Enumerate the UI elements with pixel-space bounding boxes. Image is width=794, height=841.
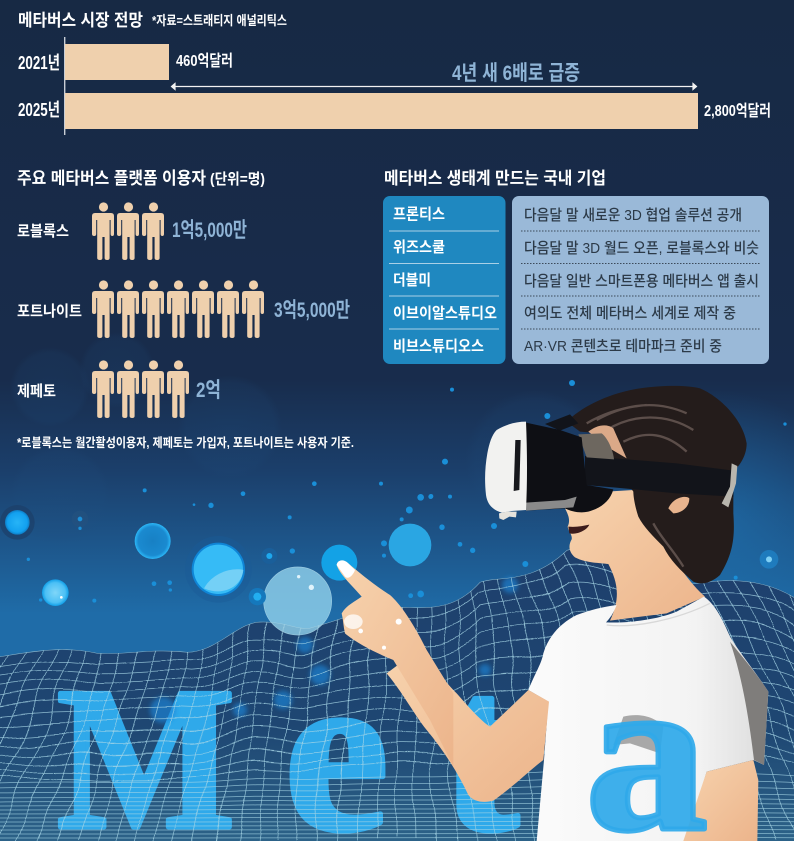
far arm <box>683 760 758 841</box>
bar 2025 <box>65 93 698 129</box>
bubble <box>135 523 171 559</box>
knuckle highlight <box>344 614 363 629</box>
dense foreground latitude lines <box>0 770 794 838</box>
wireframe terrain backing <box>0 549 794 841</box>
panel: company plans <box>512 196 769 364</box>
value: 1억5,000만 <box>172 219 247 242</box>
longitudinal lines <box>0 540 794 841</box>
floating bubbles and particles <box>0 481 445 635</box>
heading: domestic companies: 메타버스 생태계 만드는 국내 기업 <box>384 169 606 188</box>
wireframe terrain grid <box>0 540 794 841</box>
plan 3: 다음달 일반 스마트폰용 메타버스 앱 출시 <box>524 273 759 290</box>
small particles right <box>406 380 787 598</box>
label: 제페토 <box>17 383 56 400</box>
company 4: 이브이알스튜디오 <box>393 305 497 322</box>
chart title: 메타버스 시장 전망 <box>18 11 143 30</box>
headset front cover <box>485 422 527 513</box>
plan 4: 여의도 전체 메타버스 세계로 제작 중 <box>524 305 736 322</box>
strap buckle <box>722 463 737 507</box>
label 2021: 2021년 <box>18 53 60 73</box>
footnote: *로블록스는 월간활성이용자, 제페토는 가입자, 포트나이트는 사용자 기준. <box>17 435 354 450</box>
forehead <box>588 425 627 458</box>
value 2025: 2,800억달러 <box>704 102 771 120</box>
value: 3억5,000만 <box>274 299 350 322</box>
headset side frame <box>578 433 614 459</box>
shirt <box>528 597 768 841</box>
plan 1: 다음달 말 새로운 3D 협업 솔루션 공개 <box>524 207 742 224</box>
hair <box>567 386 747 583</box>
person icons <box>92 280 264 338</box>
arrow: growth span <box>172 84 696 90</box>
ear <box>668 497 689 513</box>
growth callout: 4년 새 6배로 급증 <box>452 62 580 85</box>
person icons <box>92 360 189 418</box>
source note: *자료=스트래티지 애널리틱스 <box>152 13 287 28</box>
value: 2억 <box>196 379 221 402</box>
panel: company names <box>383 196 506 364</box>
bubble <box>389 524 431 566</box>
hair highlights <box>587 405 693 567</box>
boy with VR headset <box>387 386 768 841</box>
company 1: 프론티스 <box>393 206 445 223</box>
pictogram row: Roblox <box>17 202 247 260</box>
cover slot <box>514 440 521 491</box>
value 2021: 460억달러 <box>176 52 233 70</box>
mesh glints <box>150 577 518 723</box>
top headset strap <box>545 414 578 431</box>
bubble <box>321 545 357 581</box>
pointing hand <box>337 560 453 767</box>
big letters: Met <box>57 623 519 841</box>
bar 2021 <box>65 44 169 80</box>
heading: platform users: (단위=명) <box>210 171 265 188</box>
company 2: 위즈스쿨 <box>393 239 445 256</box>
company 5: 비브스튜디오스 <box>393 338 484 355</box>
pictogram row: Zepeto <box>17 360 221 418</box>
headset lower trim <box>526 497 577 511</box>
label 2025: 2025년 <box>18 100 60 120</box>
translucent bubble <box>264 567 332 635</box>
neck and face <box>565 490 705 621</box>
label: 로블록스 <box>17 223 69 240</box>
background bokeh glows <box>10 332 794 650</box>
plan 5: AR·VR 콘텐츠로 테마파크 준비 중 <box>524 338 722 355</box>
axis <box>64 37 65 135</box>
plan 2: 다음달 말 3D 월드 오픈, 로블록스와 비슷 <box>524 240 759 257</box>
bubble <box>42 579 69 606</box>
company 3: 더블미 <box>393 272 431 289</box>
bubble <box>0 505 35 540</box>
fingertip highlight <box>337 560 355 578</box>
near arm <box>387 648 549 802</box>
latitude lines <box>0 564 794 668</box>
mouth <box>568 525 589 534</box>
head strap <box>585 456 733 497</box>
bar chart: market outlook <box>18 37 771 135</box>
heading: platform users: 주요 메타버스 플랫폼 이용자 <box>17 169 206 188</box>
collar <box>607 603 710 626</box>
bubble <box>185 536 252 603</box>
headset shell <box>526 423 613 512</box>
headset clips <box>499 512 517 520</box>
pictogram row: Fortnite <box>17 280 350 338</box>
shirt fold <box>613 715 663 753</box>
person icons <box>92 202 164 260</box>
sleeve shadow <box>730 642 768 765</box>
label: 포트나이트 <box>17 303 82 320</box>
